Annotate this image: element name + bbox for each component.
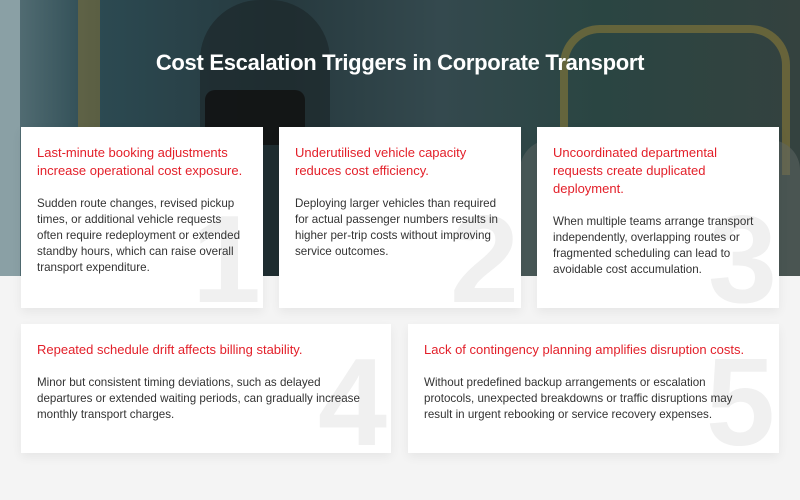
card 3: When multiple teams arrange transport independently, overlapping routes or fragmented scheduling can lead to avoidable cost accumulation.: [553, 215, 753, 276]
card 5: Without predefined backup arrangements or escalation protocols, unexpected breakdowns or traffic disruptions may result in urgent rebooking or service recovery expenses.: [424, 376, 732, 421]
card 4: [21, 324, 391, 453]
card 3: Uncoordinated departmental requests create duplicated deployment.: [553, 145, 717, 196]
title: Cost Escalation Triggers in Corporate Transport: [156, 50, 644, 75]
card 1: [21, 127, 263, 308]
card 2: Deploying larger vehicles than required for actual passenger numbers results in higher per-trip costs without improving service outcomes.: [295, 197, 498, 258]
card 2: Underutilised vehicle capacity reduces cost efficiency.: [295, 145, 466, 178]
card 4: Minor but consistent timing deviations, such as delayed departures or extended waiting periods, can gradually increase monthly transport charges.: [37, 376, 360, 421]
card 1: Sudden route changes, revised pickup times, or additional vehicle requests often require redeployment or extended standby hours, which can raise overall transport expenditure.: [37, 197, 240, 274]
card 3: [537, 127, 779, 308]
background photo: [0, 0, 800, 276]
card 1: Last-minute booking adjustments increase operational cost exposure.: [37, 145, 242, 178]
card 5: [408, 324, 779, 453]
card 4: Repeated schedule drift affects billing stability.: [37, 342, 302, 357]
card 2: [279, 127, 521, 308]
card 5: Lack of contingency planning amplifies disruption costs.: [424, 342, 744, 357]
